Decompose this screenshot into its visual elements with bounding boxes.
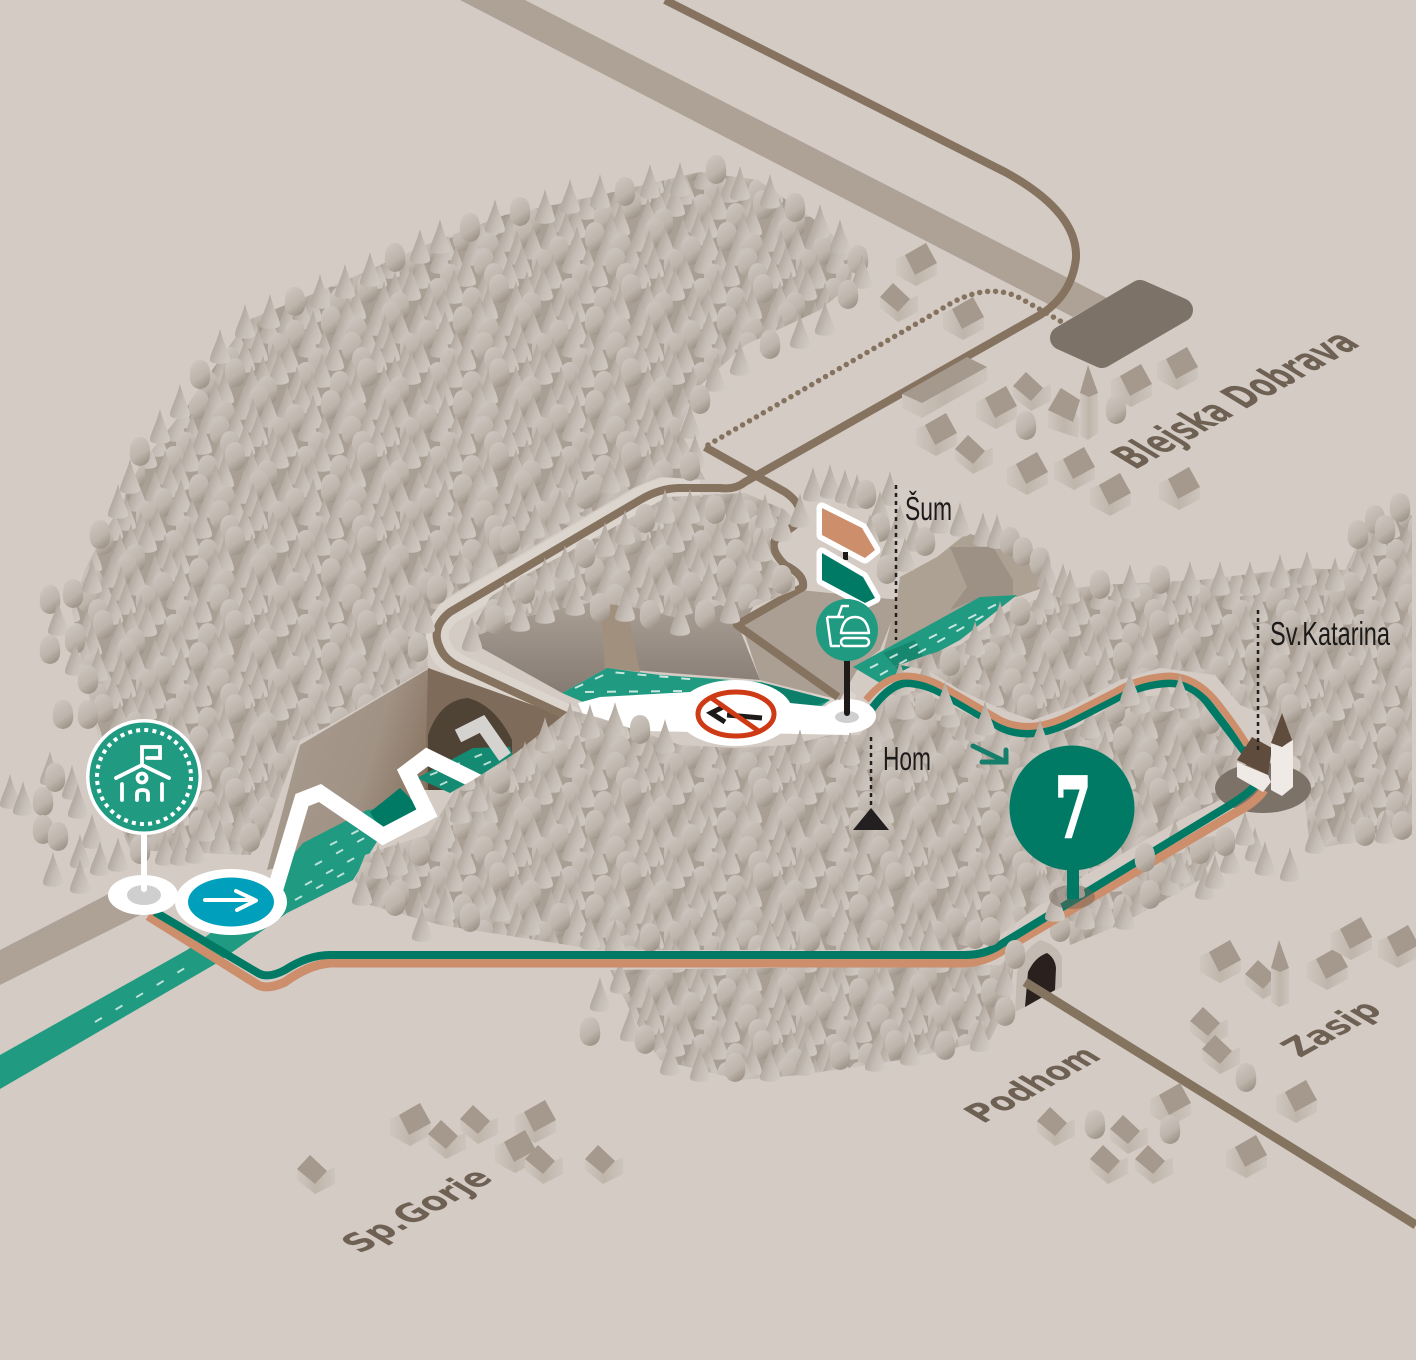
parking lot [1062, 292, 1181, 356]
cliff left [267, 668, 430, 870]
direction arrow small [973, 746, 1006, 762]
houses Sp. Gorje [297, 1100, 623, 1194]
signpost with food icon [816, 508, 878, 733]
label: Hom with peak: Hom [883, 740, 931, 777]
tunnel east [1015, 940, 1062, 1012]
cliff east [883, 533, 1057, 653]
marker: route number 7 [1010, 746, 1134, 909]
white trail [272, 724, 505, 900]
road south-east [1025, 982, 1416, 1225]
route loop [866, 676, 1247, 755]
secondary roads [437, 0, 1076, 720]
church clearing shadow [1215, 763, 1311, 813]
marker: route number 7: 7 [1055, 761, 1091, 857]
river dashes [95, 745, 505, 1022]
houses Podhom [1037, 1083, 1191, 1184]
main road wide [0, 0, 1107, 985]
forest edge trees [0, 155, 1412, 1082]
forest below route [1065, 835, 1225, 945]
forest upper west [72, 172, 856, 855]
white trail band [578, 680, 850, 746]
forest south [610, 950, 1015, 1080]
label: Sp.Gorje: Sp.Gorje [333, 1163, 502, 1259]
label: Podhom: Podhom [956, 1041, 1111, 1129]
label: Hom with peak [853, 737, 931, 830]
direction arrow blue [175, 869, 287, 935]
forest lower central [355, 690, 1250, 950]
cliff by rest stop [740, 590, 900, 700]
label: Zasip: Zasip [1273, 995, 1392, 1063]
light road verge [437, 488, 850, 720]
tunnel west [417, 668, 575, 793]
cliff middle [467, 595, 760, 693]
route west-east [148, 785, 1264, 987]
church Sv. Katarina [1237, 713, 1293, 796]
school icon sign [86, 719, 202, 835]
dotted path to parking [708, 291, 1062, 445]
start point white ellipse [108, 830, 178, 915]
forest middle [467, 493, 795, 640]
houses Blejska Dobrava [880, 243, 1200, 516]
trees over route [935, 671, 1190, 969]
houses Zasip [1190, 917, 1416, 1178]
no-entry sign [698, 692, 774, 736]
river lower section [0, 788, 425, 1089]
river middle section [562, 595, 1017, 712]
forest east [885, 512, 1412, 850]
label: Šum: Šum [905, 490, 952, 527]
